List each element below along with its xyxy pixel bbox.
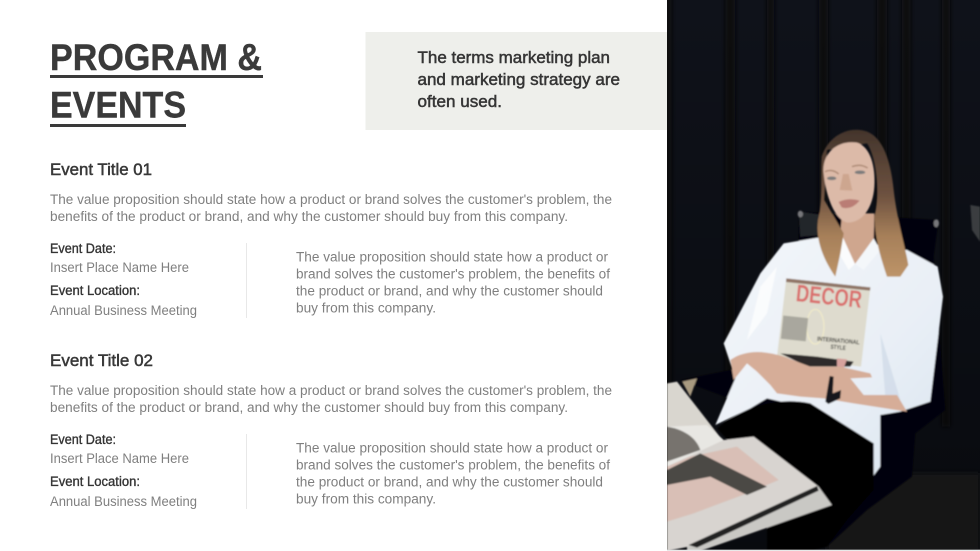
- photo: woman holding a magazine: [664, 0, 980, 551]
- event 02 summary: benefits of the product or brand, and why the customer should buy from this company.: [50, 400, 568, 415]
- magazine: [777, 278, 870, 367]
- photo: woman holding a magazine: DECOR: [795, 280, 863, 314]
- neck: [840, 213, 874, 264]
- event 02 description: [296, 440, 610, 506]
- open book: [667, 382, 724, 442]
- event 02 description: the product or brand, and why the customer should: [296, 474, 603, 490]
- event 01 description: The value proposition should state how a product or: [296, 250, 608, 264]
- hair: [818, 130, 908, 277]
- event 01 description: the product or brand, and why the customer should: [296, 284, 603, 298]
- panel: event 02: [50, 351, 612, 509]
- event 02 summary: The value proposition should state how a product or brand solves the customer's problem, the: [50, 383, 612, 398]
- photo: woman holding a magazine: STYLE: [830, 345, 846, 352]
- face: [823, 142, 875, 223]
- event 01 summary: benefits of the product or brand, and why the customer should buy from this company.: [50, 209, 568, 224]
- event 01 description: brand solves the customer's problem, the benefits of: [296, 266, 610, 282]
- event 01 summary: [50, 192, 612, 224]
- event 01 date and location: Event Date:: [50, 241, 116, 256]
- event 02 heading: Event Title 02: [50, 351, 153, 370]
- event 01 date and location: Annual Business Meeting: [50, 303, 197, 318]
- event 02 date and location: Event Date:: [50, 432, 116, 447]
- chair: [680, 212, 945, 551]
- event 02 date and location: Annual Business Meeting: [50, 494, 197, 509]
- event 01 summary: The value proposition should state how a product or brand solves the customer's problem, the: [50, 192, 612, 207]
- event 01 date and location: Insert Place Name Here: [50, 260, 189, 275]
- arms and hands: [730, 352, 907, 412]
- watch: [825, 376, 841, 404]
- event 02 date and location: [50, 432, 197, 509]
- pants: [717, 401, 874, 551]
- event 02 description: The value proposition should state how a product or: [296, 440, 608, 456]
- event 02 date and location: Event Location:: [50, 474, 140, 489]
- shirt: [715, 235, 943, 480]
- event 01 description: [296, 250, 610, 316]
- event 02 description: buy from this company.: [296, 492, 436, 506]
- event 01 description: buy from this company.: [296, 300, 436, 316]
- title: PROGRAM &: [50, 36, 262, 78]
- callout panel: The terms marketing plan: [418, 48, 610, 67]
- event 02 description: brand solves the customer's problem, the benefits of: [296, 458, 610, 472]
- photo: woman holding a magazine: INTERNATIONAL: [817, 337, 860, 346]
- event 01 date and location: [50, 241, 197, 318]
- event 01 date and location: Event Location:: [50, 283, 140, 298]
- event 01 heading: Event Title 01: [50, 160, 152, 179]
- event 02 summary: [50, 383, 612, 415]
- callout panel: often used.: [418, 92, 502, 111]
- event 02 date and location: Insert Place Name Here: [50, 451, 189, 466]
- collar: [832, 232, 855, 270]
- callout panel: [366, 32, 667, 130]
- curtain background: [664, 0, 980, 551]
- callout panel: and marketing strategy are: [418, 70, 620, 89]
- panel: event 01: [50, 160, 612, 318]
- title: [50, 36, 263, 127]
- title: EVENTS: [50, 84, 186, 126]
